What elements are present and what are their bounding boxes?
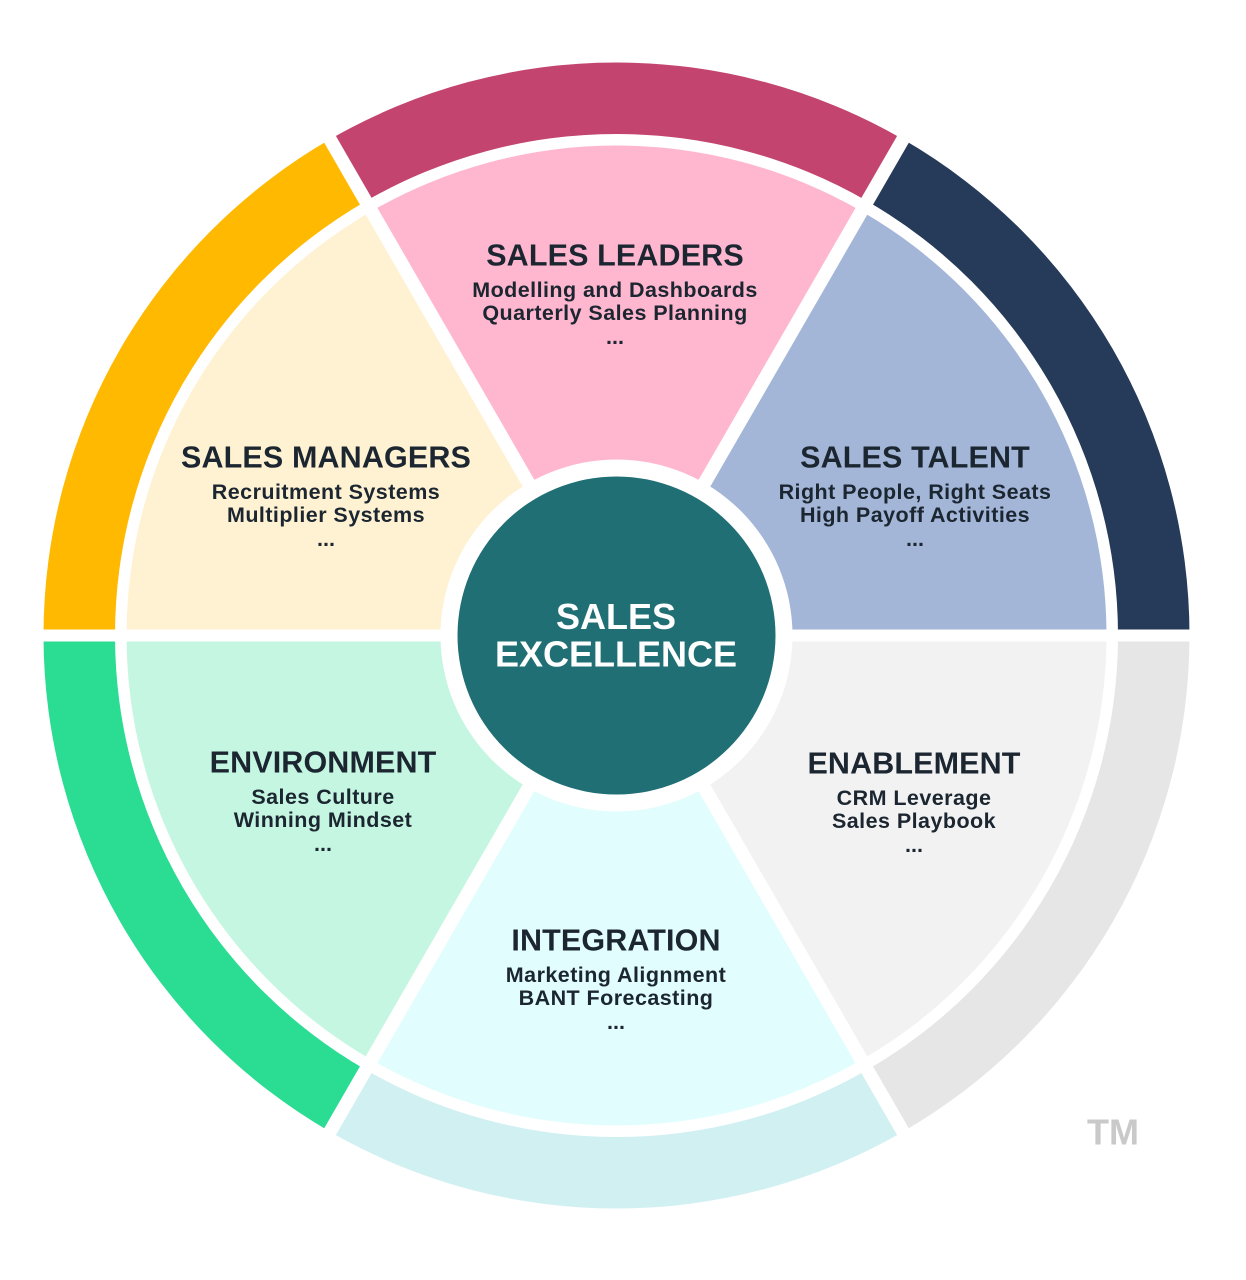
text: enablement: ENABLEMENT <box>807 746 1021 780</box>
text: environment <box>210 746 437 856</box>
text: integration: BANT Forecasting <box>519 986 713 1010</box>
text: environment: Sales Culture <box>251 785 395 809</box>
wedge: enablement <box>616 636 1106 1060</box>
text: environment: ... <box>314 832 332 856</box>
wedge: integration <box>372 636 862 1125</box>
hub circle <box>458 476 776 794</box>
text: sales managers: ... <box>317 527 335 551</box>
wedge: sales leaders <box>372 146 862 636</box>
wedge: sales managers <box>126 211 616 635</box>
outer ring: environment <box>44 636 366 1132</box>
text: enablement: ... <box>905 833 923 857</box>
text: sales leaders: Modelling and Dashboards <box>472 278 758 302</box>
outer ring: sales leaders <box>330 63 903 201</box>
text: enablement: CRM Leverage <box>837 786 991 810</box>
text: sales managers: Multiplier Systems <box>227 503 425 527</box>
text: sales leaders: Quarterly Sales Planning <box>482 301 748 325</box>
text: environment: Winning Mindset <box>234 808 412 832</box>
text: enablement: Sales Playbook <box>832 809 996 833</box>
text: integration: ... <box>607 1010 625 1034</box>
text: integration: Marketing Alignment <box>506 963 726 987</box>
text: sales talent <box>779 440 1051 551</box>
text: sales talent: High Payoff Activities <box>800 503 1030 527</box>
text: sales managers <box>181 440 471 551</box>
wedge: sales talent <box>616 211 1106 635</box>
text: sales talent: ... <box>906 527 924 551</box>
wedge: environment <box>126 636 616 1060</box>
outer ring: sales managers <box>44 139 366 636</box>
text: sales managers: Recruitment Systems <box>212 480 440 504</box>
text: sales managers: SALES MANAGERS <box>181 440 471 474</box>
outer ring: integration <box>330 1070 903 1208</box>
text: environment: ENVIRONMENT <box>210 746 437 780</box>
outer ring: sales talent <box>867 139 1190 636</box>
text: sales talent: SALES TALENT <box>800 440 1030 474</box>
hub white ring <box>440 460 792 812</box>
text: sales leaders: ... <box>606 325 624 349</box>
text: sales leaders <box>472 238 758 349</box>
outer ring: enablement <box>867 636 1190 1132</box>
trademark mark: TM <box>1087 1112 1139 1152</box>
hub title: SALES <box>556 596 676 637</box>
text: sales talent: Right People, Right Seats <box>779 480 1051 504</box>
text: enablement <box>807 746 1021 857</box>
text: integration: INTEGRATION <box>511 924 721 958</box>
hub title: EXCELLENCE <box>495 634 737 674</box>
text: sales leaders: SALES LEADERS <box>486 238 744 272</box>
text: integration <box>506 924 726 1034</box>
